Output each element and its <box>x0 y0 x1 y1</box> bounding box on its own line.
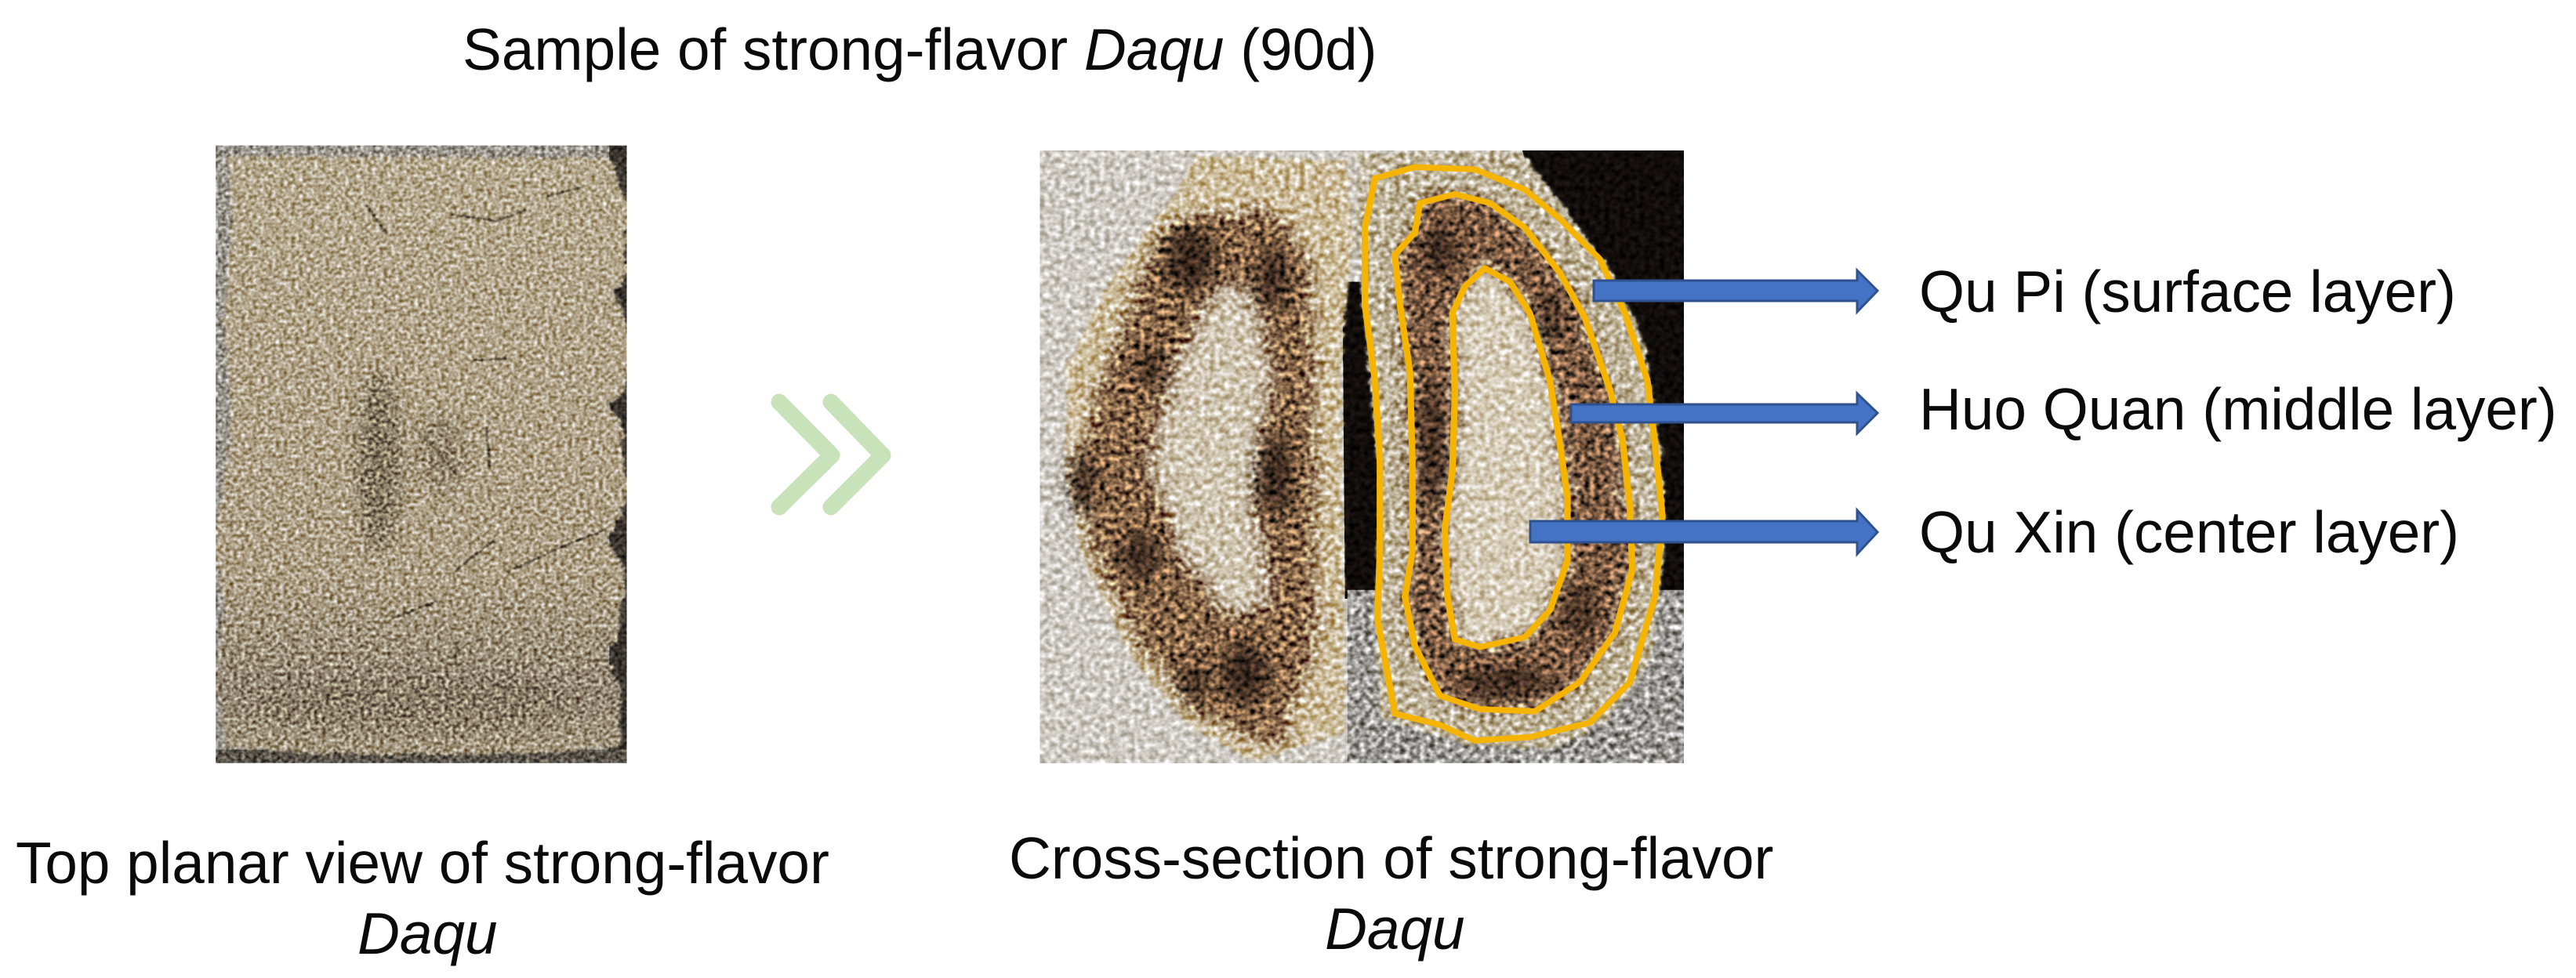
label: Huo Quan: Huo Quan (middle layer) <box>1919 376 2557 442</box>
label: Qu Xin: Qu Xin (center layer) <box>1919 499 2459 565</box>
label: Qu Pi: Qu Pi (surface layer) <box>1919 259 2456 324</box>
title: Sample of strong-flavor Daqu (90d) <box>463 16 1377 82</box>
arrow: Qu Xin <box>1530 510 1878 554</box>
outline: Qu Pi boundary <box>1365 167 1663 741</box>
photo: top planar view of Daqu block <box>214 146 629 763</box>
caption: cross-section: Cross-section of strong-flavor <box>1009 825 1773 891</box>
icon: double chevron arrow <box>779 402 883 507</box>
arrow: Huo Quan <box>1571 393 1878 433</box>
photo: cross-section of Daqu with layer outlines <box>1040 150 1684 763</box>
arrow: Qu Pi <box>1594 270 1878 312</box>
caption: cross-section <box>1009 825 1773 962</box>
caption: top planar view <box>16 830 829 966</box>
outline: Qu Xin boundary <box>1445 268 1567 647</box>
caption: top planar view: Daqu <box>357 900 498 966</box>
outline: Huo Quan boundary <box>1395 194 1632 712</box>
caption: top planar view: Top planar view of strong-flavor <box>16 830 829 896</box>
caption: cross-section: Daqu <box>1325 896 1465 962</box>
